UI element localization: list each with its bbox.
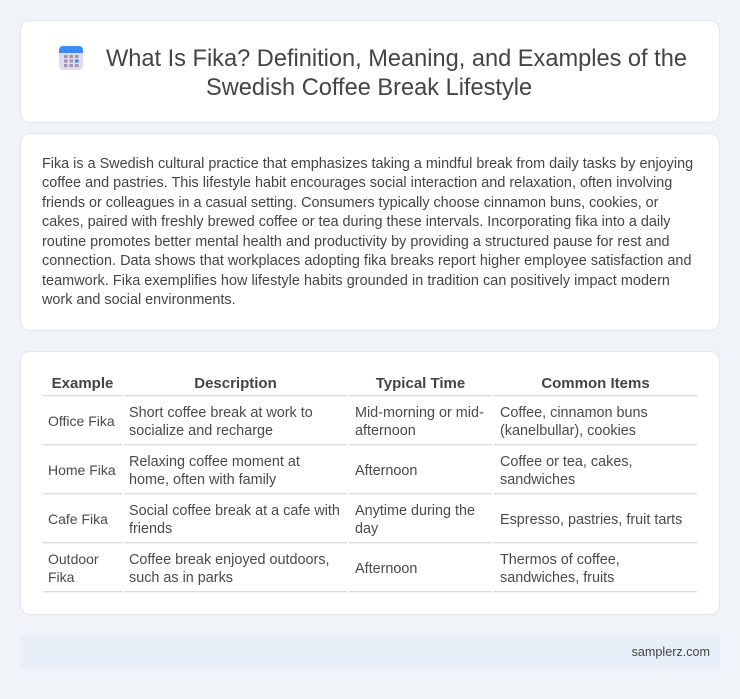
text block: paragraph: routine promotes better mental health and productivity by providing a structured pause for rest and <box>42 234 670 250</box>
table header: Description <box>194 375 277 392</box>
table row: Office Fika: Short coffee break at work to <box>129 405 313 421</box>
table header <box>52 375 650 392</box>
table row: Home Fika: Coffee or tea, cakes, <box>500 454 633 470</box>
text block: paragraph: Fika is a Swedish cultural practice that emphasizes taking a mindful break from daily tasks by enjoying <box>42 156 693 172</box>
table row: Cafe Fika: Cafe Fika <box>48 511 108 527</box>
panel: header <box>20 20 720 123</box>
panel: examples table <box>20 351 720 615</box>
table row: Outdoor Fika: sandwiches, fruits <box>500 570 614 586</box>
table row: Outdoor Fika: Outdoor <box>48 551 99 567</box>
table row: Outdoor Fika: Coffee break enjoyed outdoors, <box>129 552 330 568</box>
text block: paragraph: work and social environments. <box>42 292 236 308</box>
text block: paragraph: teamwork. Fika exemplifies how lifestyle habits grounded in tradition can positively impact modern <box>42 273 670 289</box>
table row: Outdoor Fika: Thermos of coffee, <box>500 552 620 568</box>
text block: paragraph: cakes, paired with freshly brewed coffee or tea during these intervals. Incorporating fika into a daily <box>42 214 670 230</box>
table row: Home Fika: sandwiches <box>500 472 575 488</box>
text block: paragraph: connection. Data shows that workplaces adopting fika breaks report higher employee satisfaction and <box>42 253 692 269</box>
table row: Office Fika: socialize and recharge <box>129 423 273 439</box>
table row: Home Fika <box>48 454 633 488</box>
table header: Example <box>52 375 113 392</box>
table row: Outdoor Fika: Afternoon <box>355 561 417 577</box>
table row: Home Fika: Relaxing coffee moment at <box>129 454 300 470</box>
text block: paragraph <box>42 156 693 308</box>
table row: Office Fika: Coffee, cinnamon buns <box>500 405 648 421</box>
title: Swedish Coffee Break Lifestyle <box>206 75 532 101</box>
table row: Outdoor Fika: Fika <box>48 569 74 585</box>
table row: Home Fika: Afternoon <box>355 463 417 479</box>
icon: calendar <box>59 46 83 70</box>
title: What Is Fika? Definition, Meaning, and Examples of the <box>106 46 687 72</box>
title <box>106 46 687 101</box>
table row: Office Fika: Mid-morning or mid- <box>355 405 484 421</box>
table row: Office Fika: (kanelbullar), cookies <box>500 423 636 439</box>
table row: Office Fika: Office Fika <box>48 413 115 429</box>
table row: Office Fika <box>48 405 648 439</box>
footer bar <box>20 635 720 669</box>
table row: Cafe Fika: day <box>355 521 378 537</box>
text block: paragraph: coffee and pastries. This lifestyle habit encourages social interaction and relaxation, often involving <box>42 175 672 191</box>
table row: Home Fika: home, often with family <box>129 472 276 488</box>
table row: Cafe Fika: friends <box>129 521 172 537</box>
table header: Typical Time <box>376 375 465 392</box>
table row: Cafe Fika <box>48 503 682 537</box>
table row: Outdoor Fika: such as in parks <box>129 570 233 586</box>
table row: Cafe Fika: Social coffee break at a cafe with <box>129 503 340 519</box>
table row: Home Fika: Home Fika <box>48 462 116 478</box>
table row: Office Fika: afternoon <box>355 423 416 439</box>
table row: Cafe Fika: Anytime during the <box>355 503 475 519</box>
table row: Cafe Fika: Espresso, pastries, fruit tarts <box>500 512 682 528</box>
text block: paragraph: friends or colleagues in a casual setting. Consumers typically choose cinnamon buns, cookies, or <box>42 195 658 211</box>
table header: Common Items <box>541 375 650 392</box>
panel: introduction text <box>20 133 720 331</box>
table row: Outdoor Fika <box>48 551 620 586</box>
footer credit: samplerz.com <box>632 645 710 659</box>
